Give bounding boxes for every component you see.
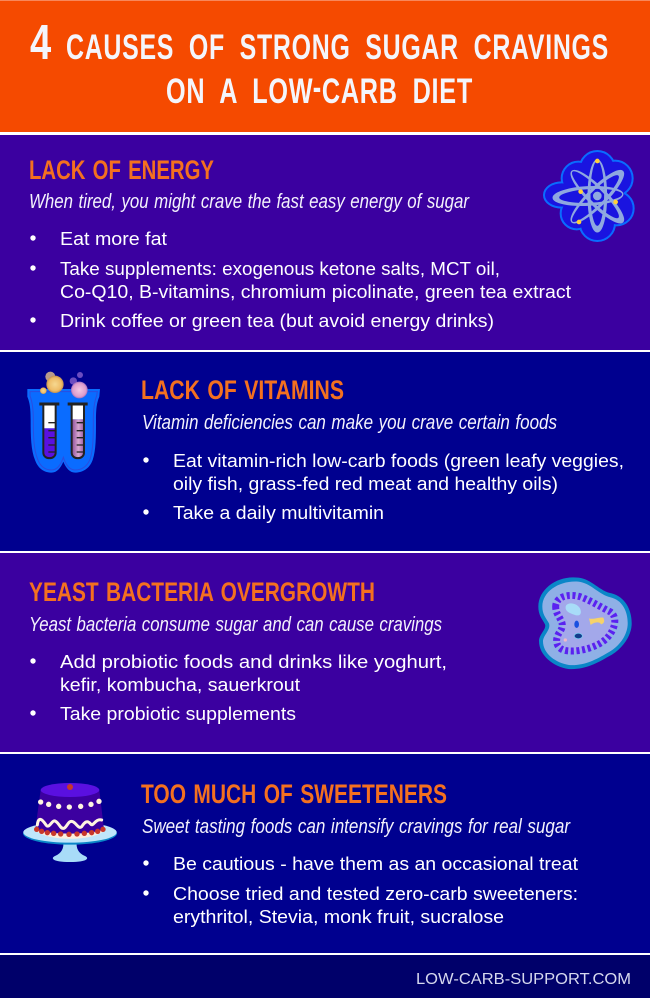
bullet list: yeast bacteria overgrowth: Take probiotic supplements: [60, 703, 296, 724]
bullet list: yeast bacteria overgrowth: Add probiotic foods and drinks like yoghurt,: [60, 651, 447, 672]
bullet list: lack of vitamins: [143, 450, 624, 523]
bullet list: lack of energy: Co-Q10, B-vitamins, chromium picolinate, green tea extract: [60, 281, 571, 302]
panel: too much of sweeteners: [0, 754, 650, 953]
bullet list: too much of sweeteners: Be cautious - have them as an occasional treat: [173, 853, 578, 874]
footer url: LOW-CARB-SUPPORT.COM: [416, 971, 631, 988]
panel: lack of energy: [0, 135, 650, 350]
bullet list: lack of energy: [30, 228, 571, 331]
bullet list: lack of energy: Eat more fat: [60, 228, 167, 249]
bullet list: too much of sweeteners: Choose tried and tested zero-carb sweeteners:: [173, 883, 578, 904]
subheading: too much of sweeteners: Sweet tasting foods can intensify cravings for real sugar: [142, 815, 571, 838]
subheading: lack of energy: When tired, you might crave the fast easy energy of sugar: [29, 190, 470, 213]
heading: lack of vitamins: LACK OF VITAMINS: [141, 375, 344, 405]
icon: test tubes: [27, 372, 100, 473]
bullet list: yeast bacteria overgrowth: [30, 651, 447, 724]
panel: yeast bacteria overgrowth: [0, 553, 650, 752]
heading: lack of energy: LACK OF ENERGY: [29, 155, 214, 185]
bullet list: yeast bacteria overgrowth: kefir, kombucha, sauerkrout: [60, 674, 300, 695]
bullet list: lack of energy: Drink coffee or green tea (but avoid energy drinks): [60, 310, 494, 331]
bullet list: lack of energy: Take supplements: exogenous ketone salts, MCT oil,: [60, 258, 500, 279]
footer: [0, 955, 650, 998]
icon: yeast cell: [538, 577, 632, 669]
heading: too much of sweeteners: TOO MUCH OF SWEETENERS: [141, 779, 447, 809]
title banner: [0, 0, 650, 132]
title banner: 4: [30, 16, 52, 70]
bullet list: lack of vitamins: oily fish, grass-fed red meat and healthy oils): [173, 473, 558, 494]
icon: atom: [545, 152, 633, 240]
title banner: ON A LOW: [166, 72, 370, 111]
panel: lack of vitamins: [0, 352, 650, 551]
subheading: yeast bacteria overgrowth: Yeast bacteria consume sugar and can cause cravings: [29, 613, 442, 636]
title banner: CARB DIET: [322, 72, 473, 111]
heading: yeast bacteria overgrowth: YEAST BACTERIA OVERGROWTH: [29, 577, 375, 607]
bullet list: too much of sweeteners: [143, 853, 578, 927]
subheading: lack of vitamins: Vitamin deficiencies can make you crave certain foods: [142, 411, 557, 434]
title banner: -: [313, 68, 322, 107]
bullet list: lack of vitamins: Eat vitamin-rich low-carb foods (green leafy veggies,: [173, 450, 624, 471]
bullet list: lack of vitamins: Take a daily multivitamin: [173, 502, 384, 523]
bullet list: too much of sweeteners: erythritol, Stevia, monk fruit, sucralose: [173, 906, 504, 927]
icon: cake: [23, 783, 117, 862]
